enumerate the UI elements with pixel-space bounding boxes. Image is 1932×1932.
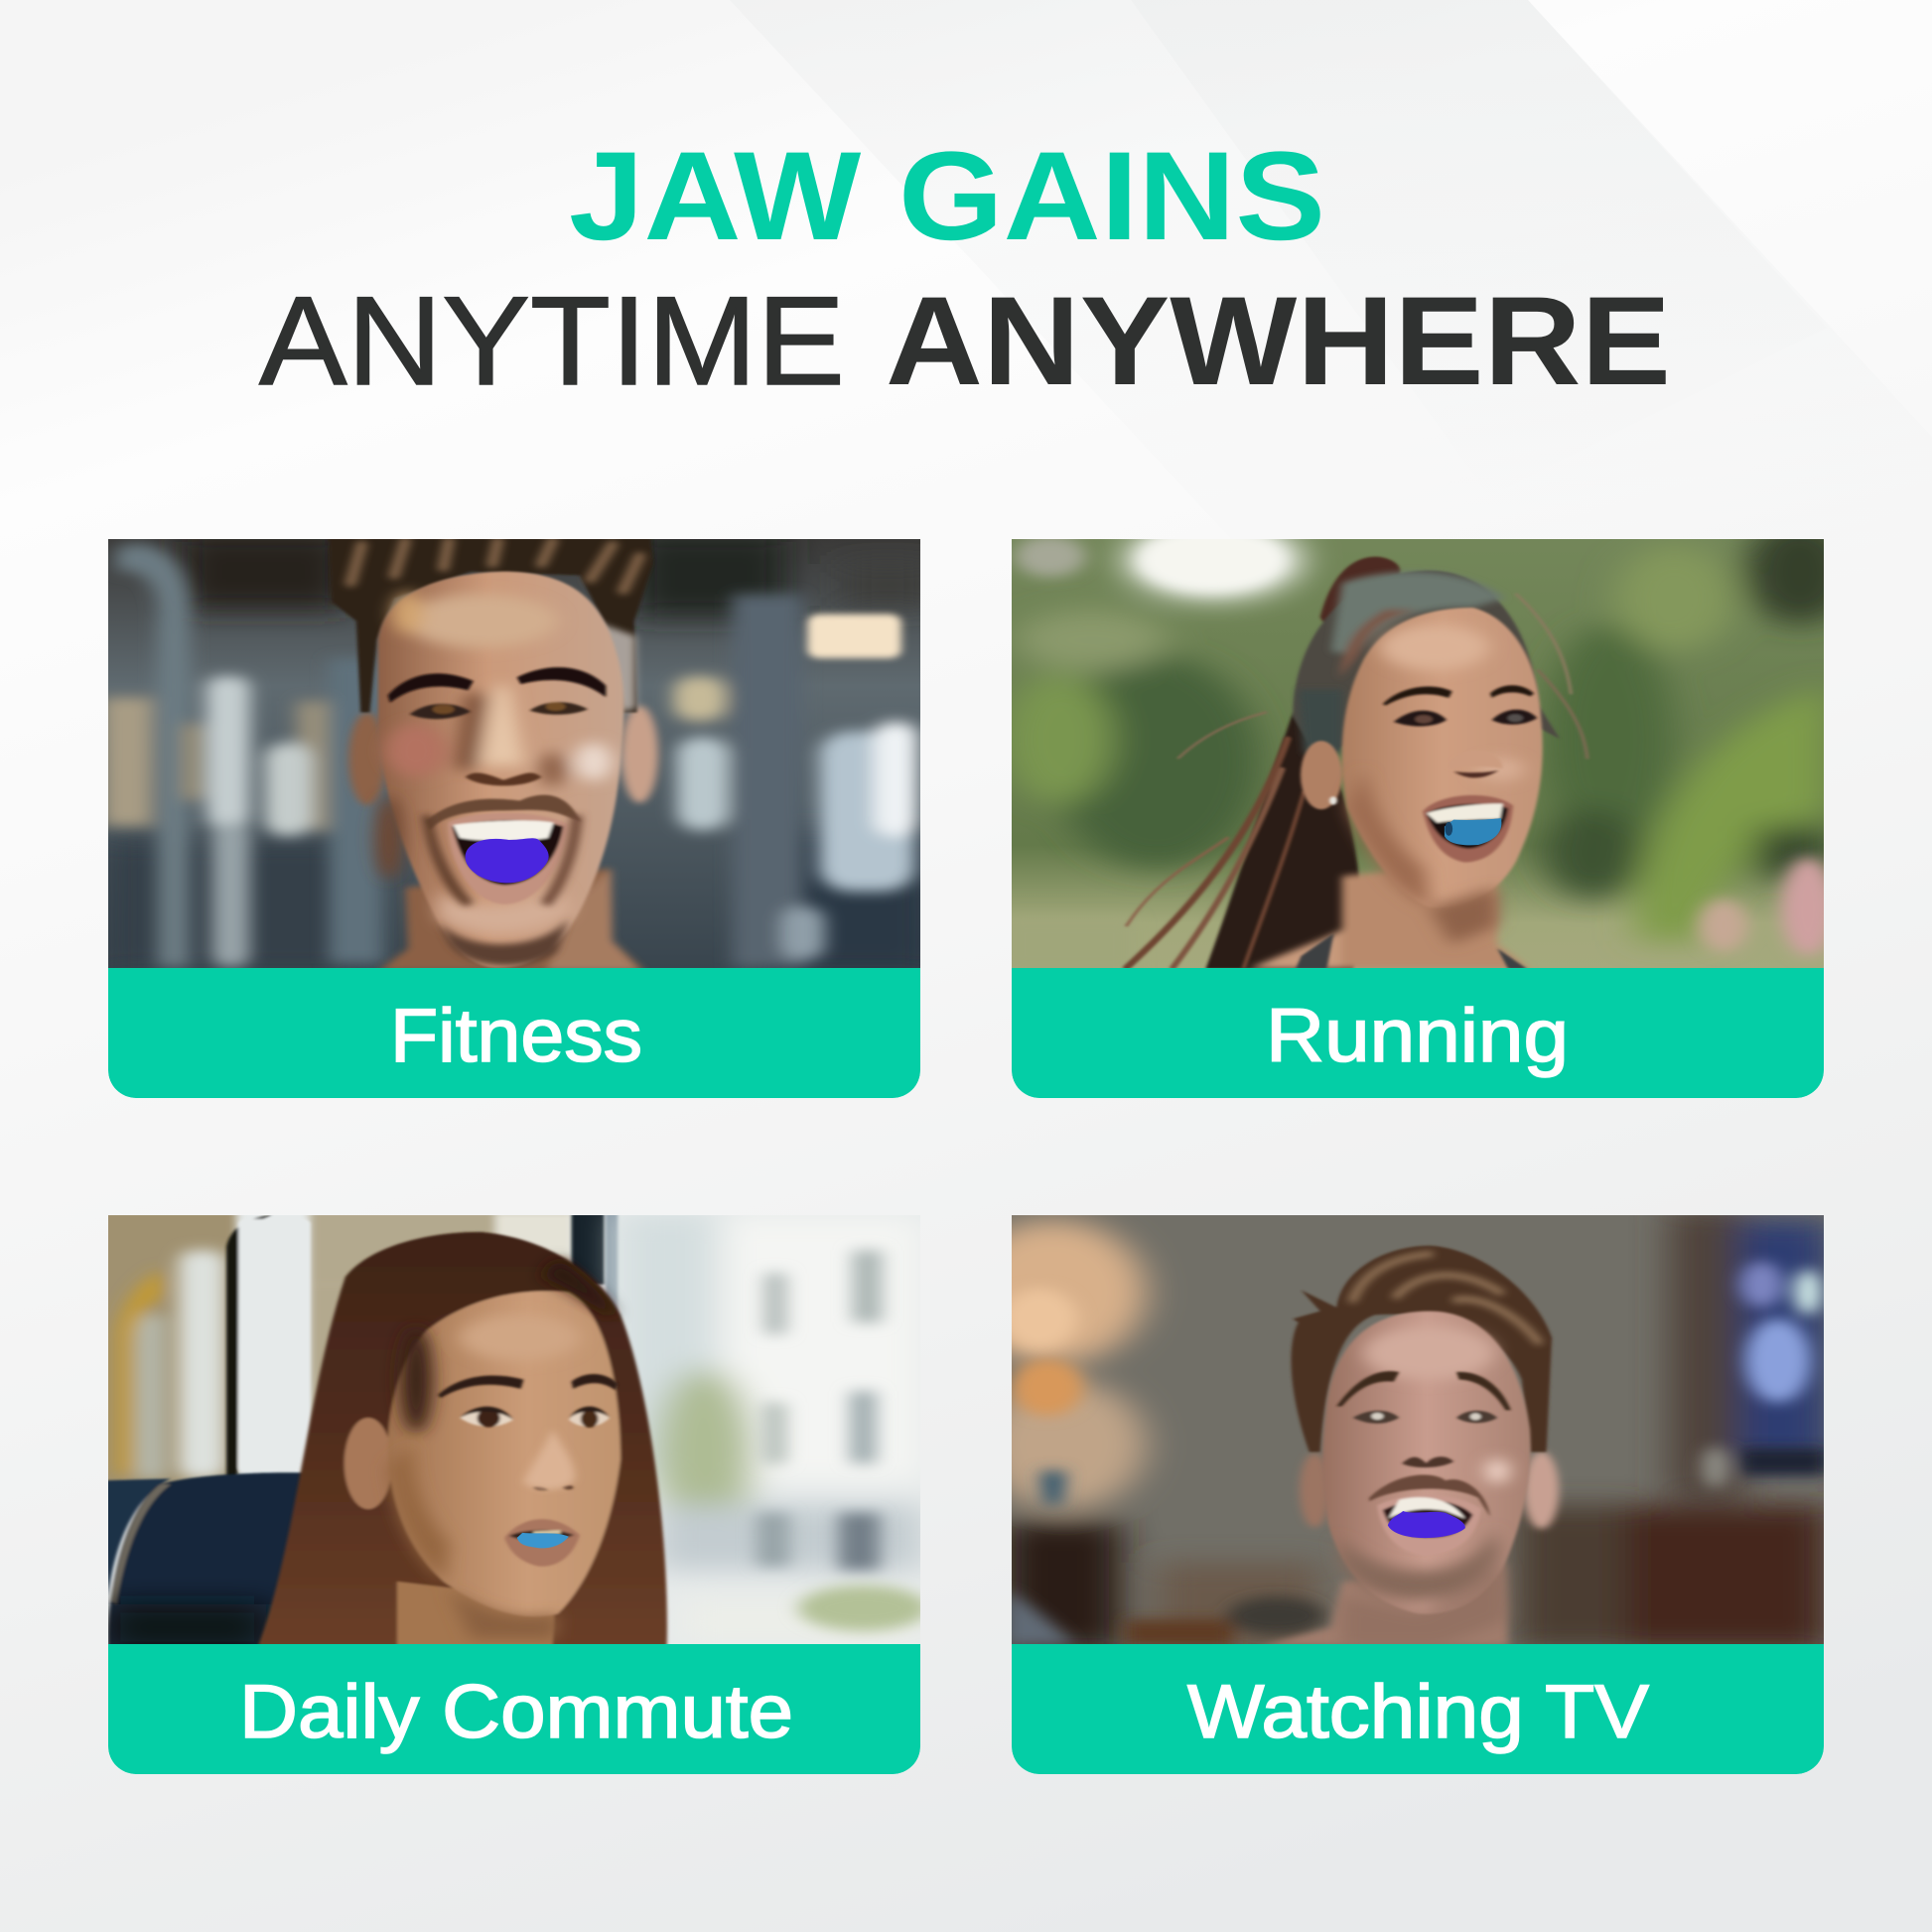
label: Running: Running: [1266, 994, 1569, 1078]
park background: [993, 518, 1855, 983]
heading line 2: ANYWHERE: ANYWHERE: [886, 270, 1671, 411]
panel: Daily Commute: [108, 1215, 920, 1774]
label: Daily Commute: [108, 1644, 920, 1774]
panel: Watching TV: [1012, 1215, 1824, 1774]
gym background: [89, 526, 944, 983]
panel: Fitness: [108, 539, 920, 1098]
label: Fitness: [108, 968, 920, 1098]
heading line 2: ANYTIME: ANYTIME: [259, 270, 845, 411]
photo: woman running outdoors: [1012, 539, 1824, 968]
photo: man in gym: [108, 539, 920, 968]
living room background: [960, 1200, 1848, 1658]
person: smiling man: [1260, 1246, 1559, 1646]
person: smiling man: [329, 537, 658, 971]
label: Running: [1012, 968, 1824, 1098]
title: [258, 125, 1671, 411]
person: smiling woman with ponytail: [1127, 557, 1587, 969]
train window background: [89, 1200, 944, 1658]
mouthguard: purple: [1388, 1511, 1465, 1538]
label: Fitness: Fitness: [390, 994, 642, 1078]
label: Watching TV: Watching TV: [1187, 1670, 1649, 1754]
seat: [100, 1472, 313, 1646]
label: Daily Commute: Daily Commute: [239, 1670, 793, 1754]
heading line 1: JAW GAINS: JAW GAINS: [569, 125, 1325, 266]
photo: man on sofa in living room: [1012, 1215, 1824, 1644]
mouthguard: purple: [466, 838, 549, 883]
panel: Running: [1012, 539, 1824, 1098]
photo: woman on train: [108, 1215, 920, 1644]
label: Watching TV: [1012, 1644, 1824, 1774]
mouthguard: blue: [1445, 818, 1501, 845]
person: woman with long brown hair: [258, 1232, 667, 1646]
mouthguard: light blue: [517, 1533, 569, 1548]
